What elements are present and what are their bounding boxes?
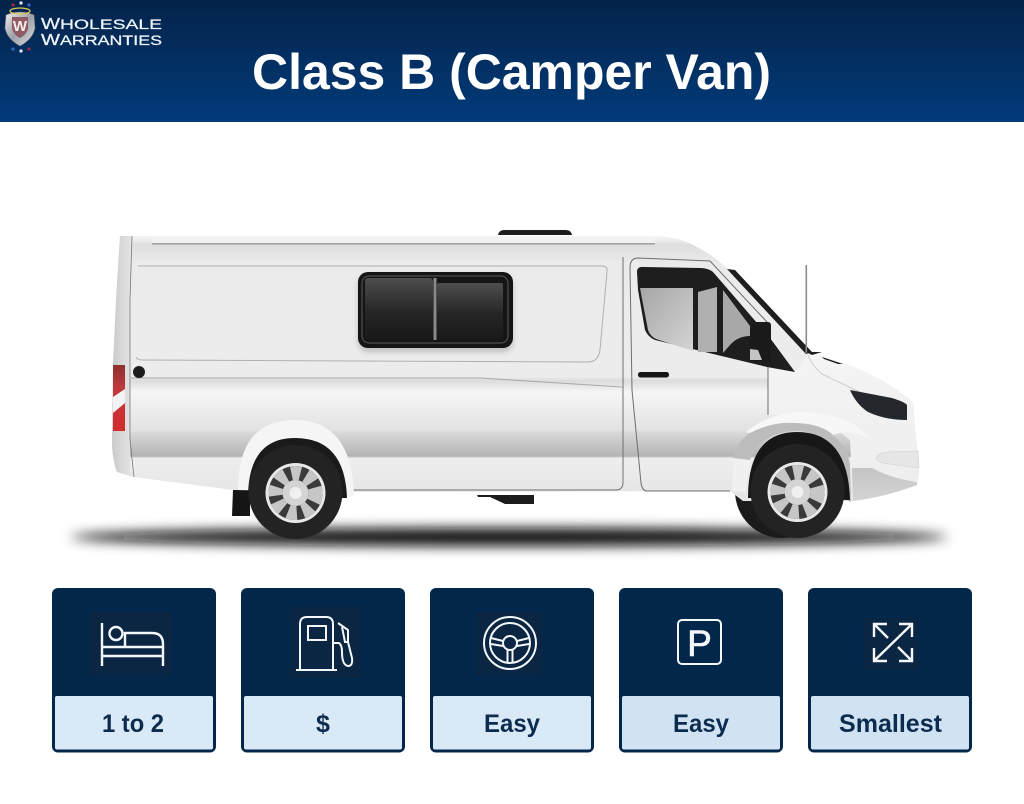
logo wordmark: W bbox=[41, 16, 61, 33]
ground shadow bbox=[71, 528, 947, 546]
mudflap bbox=[232, 490, 250, 516]
cab door outline bbox=[630, 258, 768, 491]
front wheel bbox=[748, 432, 850, 538]
icon: parking sign: P bbox=[687, 623, 712, 664]
icon: parking sign bbox=[678, 620, 721, 664]
label: Smallest bbox=[839, 710, 943, 738]
rear door strip bbox=[112, 236, 134, 477]
front lower sill bbox=[732, 458, 750, 492]
door handle bbox=[638, 372, 669, 378]
logo wordmark: W bbox=[41, 32, 61, 49]
front bumper bbox=[852, 451, 919, 501]
spec card: size bbox=[808, 588, 972, 752]
label: Easy bbox=[673, 710, 729, 738]
side sliding window bbox=[358, 272, 513, 352]
van illustration bbox=[71, 230, 947, 546]
cab front panel bbox=[768, 352, 919, 501]
icon: steering wheel bbox=[477, 612, 542, 675]
rear wheel bbox=[248, 438, 347, 539]
label: 1 to 2 bbox=[102, 710, 164, 738]
side mirror bbox=[749, 322, 771, 362]
label: Easy bbox=[484, 710, 540, 738]
wiper bbox=[806, 352, 843, 364]
icon: expand arrows bbox=[863, 618, 918, 670]
label: $ bbox=[316, 710, 330, 738]
hood seam bbox=[808, 355, 872, 398]
logo wordmark: ARRANTIES bbox=[60, 33, 162, 48]
rear fender flare bbox=[238, 420, 354, 497]
cab window bbox=[637, 267, 795, 372]
header band bbox=[0, 0, 1024, 122]
antenna bbox=[806, 265, 807, 353]
roof rail bbox=[152, 237, 655, 245]
spec card: fuel cost bbox=[241, 588, 405, 752]
windshield edge bbox=[727, 269, 812, 354]
door seam bbox=[350, 257, 623, 490]
rear door edge line bbox=[130, 236, 134, 477]
spec card: parking bbox=[619, 588, 783, 752]
icon: shield: W bbox=[13, 18, 28, 35]
front fender flare bbox=[746, 412, 872, 440]
logo: Wholesale Warranties bbox=[5, 1, 166, 53]
van body bbox=[112, 236, 919, 501]
spec card: sleeps bbox=[52, 588, 216, 752]
side panel outline bbox=[136, 266, 607, 362]
title: Class B (Camper Van) bbox=[252, 44, 771, 100]
icon: shield bbox=[5, 1, 35, 53]
body crease line bbox=[131, 378, 622, 387]
icon: bed bbox=[90, 612, 172, 675]
dual rear tyre behind front wheel bbox=[735, 444, 829, 538]
logo wordmark: HOLESALE bbox=[60, 17, 162, 32]
under-body tank bbox=[477, 495, 534, 504]
rear marker bbox=[133, 366, 145, 378]
headlight bbox=[850, 390, 907, 420]
icon: fuel pump bbox=[290, 607, 361, 678]
tail light bbox=[113, 365, 125, 431]
front fender arch bbox=[733, 423, 851, 502]
spec card: driving bbox=[430, 588, 594, 752]
roof vent bbox=[498, 230, 572, 235]
